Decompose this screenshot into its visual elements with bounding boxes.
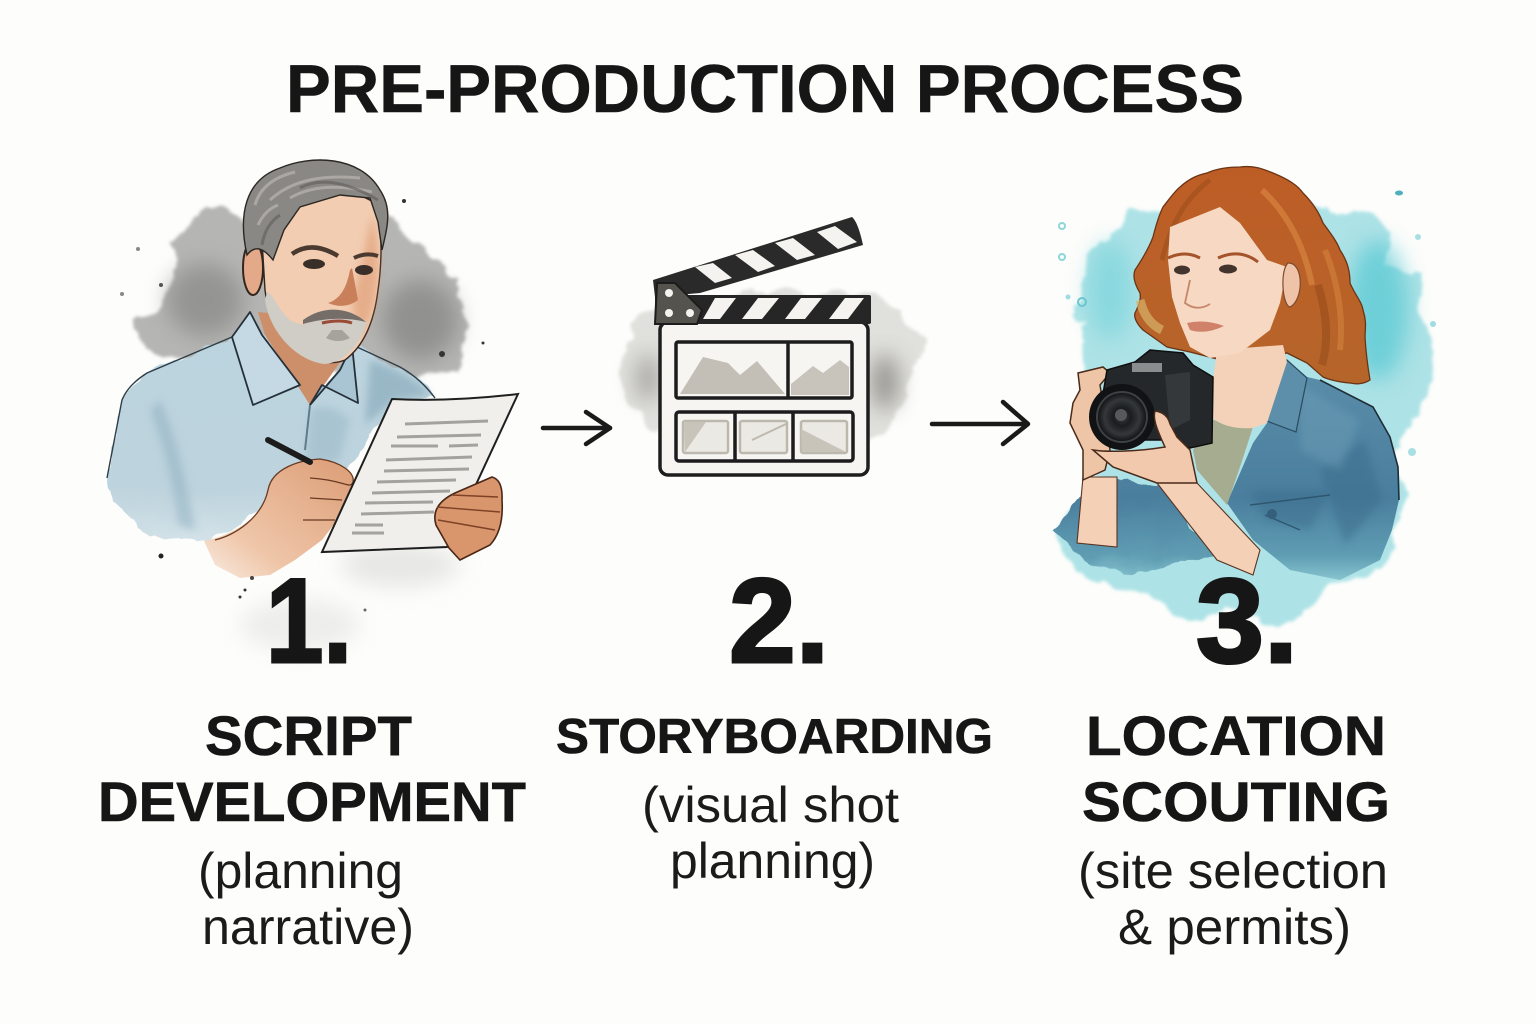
jacket	[1227, 360, 1399, 580]
step 3 heading: SCOUTING	[1082, 770, 1390, 833]
left hand with pen	[204, 440, 353, 578]
step 1 heading: SCRIPT	[205, 704, 412, 767]
step 1 heading	[98, 704, 526, 833]
step number 1: 1.	[266, 554, 352, 688]
camera	[1089, 350, 1213, 450]
forearms	[1077, 477, 1260, 575]
step 1 description: (planning	[198, 843, 403, 899]
step 2 description: (visual shot	[642, 777, 899, 833]
t-shirt	[1193, 420, 1253, 505]
front hand	[1093, 411, 1197, 483]
illustration: location scout woman	[1053, 167, 1436, 617]
hair	[243, 160, 388, 260]
arrow 2	[932, 402, 1028, 444]
collar	[232, 312, 358, 450]
step 1 description	[198, 843, 414, 955]
board body	[660, 322, 868, 475]
shirt	[107, 330, 435, 542]
clapper arm	[653, 217, 863, 297]
step number 3: 3.	[1196, 554, 1298, 688]
icon: clapperboard	[618, 217, 925, 475]
arrow 1	[543, 412, 610, 444]
hair	[1134, 167, 1370, 384]
face	[1168, 207, 1300, 358]
head	[243, 160, 388, 364]
step 3 description	[1078, 843, 1388, 955]
title: PRE-PRODUCTION PROCESS	[286, 51, 1244, 127]
step 3 description: & permits)	[1118, 899, 1351, 955]
grey watercolor wash	[120, 199, 484, 587]
step 3 heading: LOCATION	[1086, 704, 1386, 767]
right hand	[435, 477, 502, 560]
step 1 description: narrative)	[202, 899, 414, 955]
step 2 heading: STORYBOARDING	[556, 710, 993, 764]
paper	[322, 394, 518, 552]
step 3 description: (site selection	[1078, 843, 1388, 899]
eyes and brows	[292, 247, 338, 256]
beard	[265, 292, 367, 364]
illustration: scriptwriter man	[107, 160, 518, 587]
teal watercolor wash	[1055, 190, 1436, 617]
step 2 description: planning)	[670, 833, 875, 889]
neck and chest	[1212, 345, 1287, 428]
grey wash	[618, 290, 925, 435]
left sleeve	[1053, 477, 1213, 575]
large storyboard frames	[676, 342, 852, 398]
back hand	[1070, 367, 1110, 480]
neck	[258, 312, 352, 405]
step 2 description	[642, 777, 899, 889]
step 3 heading	[1082, 704, 1390, 833]
step number 2: 2.	[729, 554, 829, 688]
step 1 heading: DEVELOPMENT	[98, 770, 526, 833]
clapper bar	[655, 283, 871, 324]
small storyboard frames	[676, 412, 853, 461]
